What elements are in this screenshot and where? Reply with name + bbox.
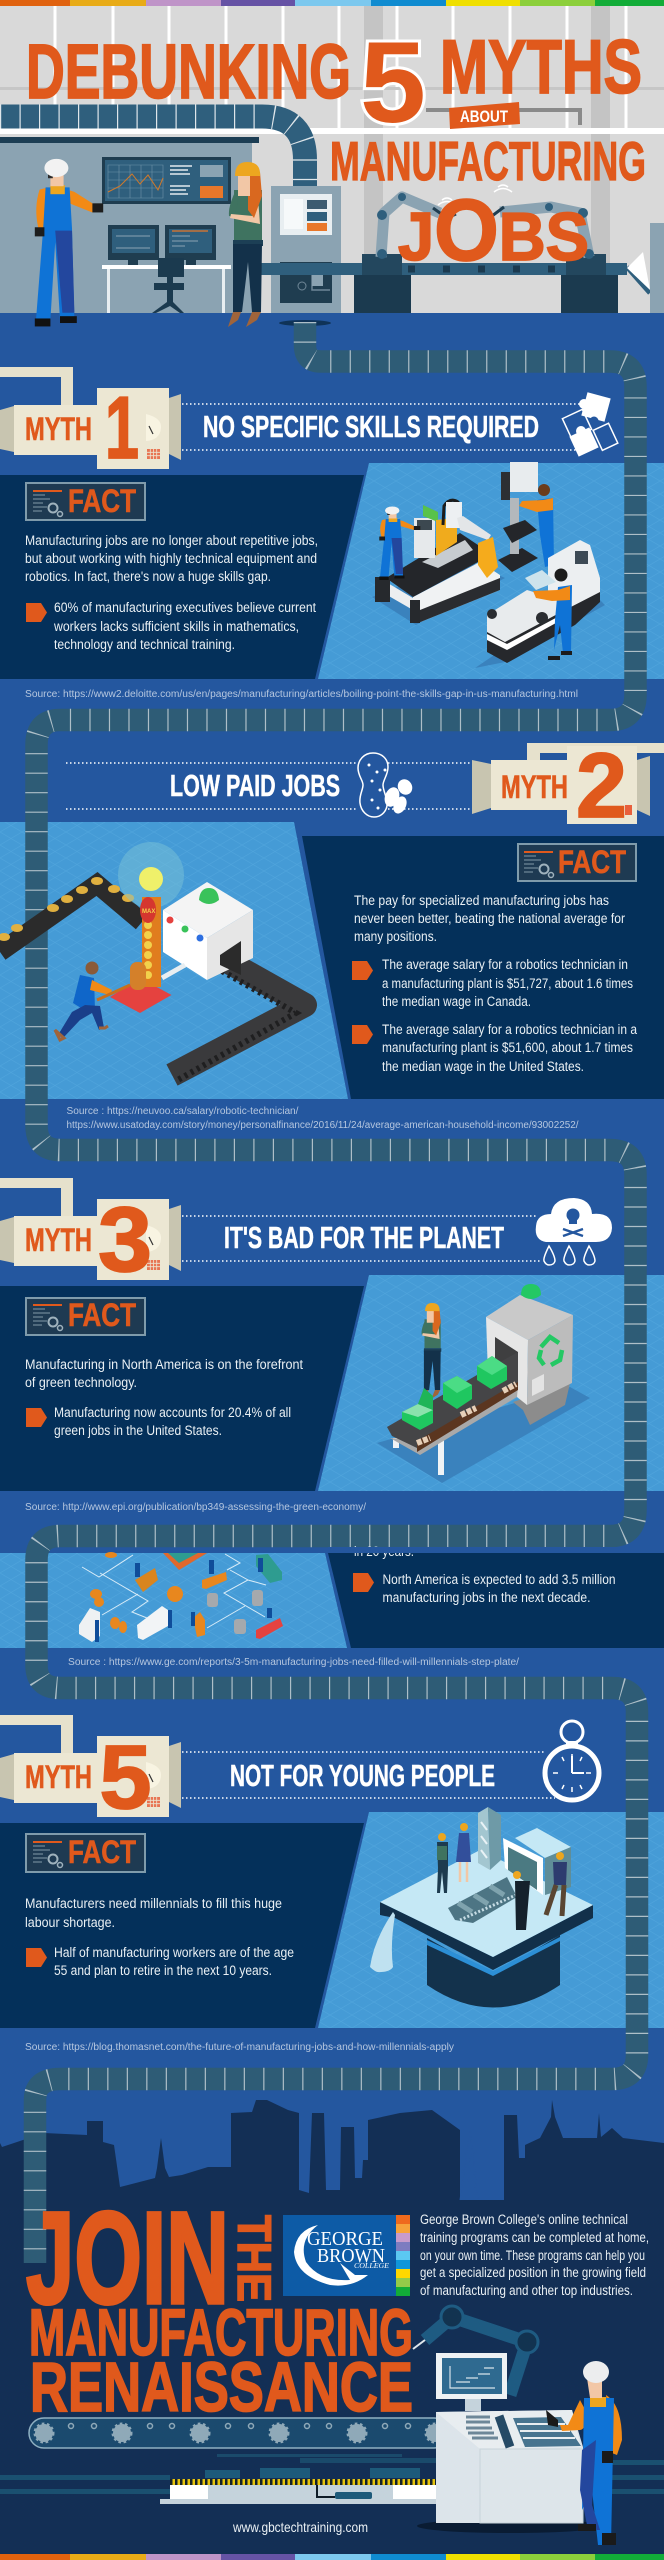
- myth 2 bullet: United States: the median wage in the United States.: [382, 1059, 584, 1074]
- fact badge: FACT: [68, 483, 136, 519]
- myth 2 badge: [472, 735, 664, 837]
- output belt: [172, 960, 305, 1081]
- George Brown College logo: GEORGE: [307, 2228, 383, 2250]
- hero title: DEBUNKING: [26, 29, 351, 115]
- myth 2 heading: LOW PAID JOBS: [170, 768, 340, 803]
- cutting bed machine: [375, 500, 500, 623]
- myth 2 fact text: [354, 893, 625, 944]
- myth 2 bullet: Canada: the median wage in Canada.: [382, 994, 531, 1009]
- college description: [420, 2212, 649, 2298]
- RENAISSANCE headline: RENAISSANCE: [30, 2348, 413, 2426]
- myth 3 source: Source: http://www.epi.org/publication/bp349-assessing-the-green-economy/: [25, 1502, 366, 1513]
- myth 5 fact text: Manufacturers need millennials to fill this huge: [25, 1896, 282, 1911]
- myth 2 fact text: The pay for specialized manufacturing jobs has: [354, 893, 609, 908]
- closing section: [0, 2184, 664, 2545]
- top colour bar: [0, 0, 664, 6]
- myth 5 heading: NOT FOR YOUNG PEOPLE: [230, 1758, 495, 1793]
- floor hatch: [279, 320, 331, 326]
- college description: George Brown College's online technical: [420, 2212, 628, 2227]
- MYTH 4 remnant section: [68, 1544, 664, 1668]
- myth 1 badge: MYTH: [25, 411, 92, 447]
- dotted rules: [182, 404, 580, 450]
- myth 2 bullet: United States: manufacturing plant is $51,600, about 1.7 times: [382, 1040, 633, 1055]
- fact badge: [26, 483, 145, 520]
- operator at lathe: [533, 568, 572, 660]
- MYTH 2 section: [0, 735, 664, 1131]
- MYTH 5 section: [0, 1715, 599, 2053]
- hero illustration: factory: [0, 6, 664, 313]
- panel backgrounds: myth 2: [0, 822, 664, 1099]
- myth 2 fact text: never been better, beating the national average for: [354, 911, 625, 926]
- worker at console: [546, 2361, 622, 2545]
- George Brown College logo: BROWN: [317, 2245, 385, 2267]
- fact badge: [26, 1297, 145, 1335]
- graduation machines: [448, 1807, 571, 1923]
- fact badge: FACT: [68, 1834, 136, 1870]
- high striker tower: MAX: [142, 909, 155, 915]
- college description: of manufacturing and other top industries.: [420, 2283, 633, 2298]
- operator with white helmet: [379, 506, 420, 580]
- myth 1 badge: 1: [105, 378, 139, 477]
- myth 5 source: Source: https://blog.thomasnet.com/the-future-of-manufacturing-jobs-and-how-millennials-apply: [25, 2042, 454, 2053]
- illustration: graduation cap factory: [370, 1807, 593, 2008]
- illustration: workers at CNC machines: [372, 462, 605, 668]
- myth 3 badge: MYTH: [25, 1222, 92, 1258]
- control console: [417, 2353, 603, 2533]
- icon: stopwatch: [545, 1721, 599, 1800]
- myth 2 fact text: many positions.: [354, 929, 437, 944]
- lathe machine: [487, 540, 600, 663]
- myth 1 bullet: technology and technical training.: [54, 637, 235, 652]
- machines: [163, 1553, 207, 1570]
- control cabinet: [271, 186, 341, 313]
- myth 5 fact text: [25, 1896, 282, 1930]
- fact badge: [518, 844, 636, 881]
- about tag: [449, 102, 520, 129]
- myth 4 bullet: North America is expected to add 3.5 million: [382, 1572, 616, 1587]
- George Brown College logo: COLLEGE: [354, 2262, 390, 2270]
- myth 3 bullet: green jobs in the United States.: [54, 1423, 222, 1438]
- myth 1 source: Source: https://www2.deloitte.com/us/en/pages/manufacturing/articles/boiling-point-the-skills-gap-in-us-manufacturing.html: [25, 689, 578, 700]
- myth 1 badge: [0, 367, 181, 477]
- myth 2 source: [66, 1106, 579, 1131]
- green boxes: [402, 1356, 507, 1430]
- myth 4 bullet: manufacturing jobs in the next decade.: [382, 1590, 590, 1605]
- machine: [486, 1284, 573, 1425]
- JOIN headline: JOIN: [26, 2184, 229, 2331]
- myth 3 bullet: [26, 1405, 291, 1438]
- closing section background: skyline: [0, 2100, 664, 2560]
- myth 4 bullet: [353, 1572, 616, 1605]
- floor: [0, 313, 664, 343]
- myth 3 fact text: Manufacturing in North America is on the forefront: [25, 1357, 303, 1372]
- myth 4 source: Source : https://www.ge.com/reports/3-5m-manufacturing-jobs-need-filled-will-millennials-step-plate/: [68, 1657, 519, 1668]
- website URL: www.gbctechtraining.com: [232, 2519, 368, 2535]
- myth 1 bullet: 60% of manufacturing executives believe current: [54, 600, 316, 615]
- about tag: ABOUT: [460, 107, 508, 126]
- myth 3 badge: 3: [98, 1189, 152, 1291]
- myth 5 bullet: [26, 1945, 294, 1978]
- icon: toxic cloud: [536, 1198, 612, 1265]
- hero title: JOBS: [398, 182, 589, 279]
- drill press: [498, 462, 538, 572]
- icon: peanut: [358, 753, 415, 817]
- conveyor belt connecting the sections: [35, 322, 637, 2263]
- myth 2 bullet: Canada: The average salary for a robotics technician in: [382, 957, 628, 972]
- myth 3 fact text: of green technology.: [25, 1375, 137, 1390]
- myth 1 bullet: [26, 600, 316, 652]
- myth 5 bullet: Half of manufacturing workers are of the age: [54, 1945, 294, 1960]
- large wall monitor: [102, 157, 231, 204]
- conveyor: [387, 1352, 518, 1455]
- operator at drill: [519, 484, 554, 567]
- myth 2 bullet: Canada: [352, 957, 633, 1009]
- dotted rules: [66, 763, 472, 809]
- clipped text: in 20 years.: [354, 1544, 414, 1559]
- fact badge: [26, 1834, 145, 1872]
- panel backgrounds: myth 5: [0, 1812, 664, 2028]
- myth 5 badge: MYTH: [25, 1759, 92, 1795]
- robot arm: [413, 2306, 538, 2395]
- MANUFACTURING headline: MANUFACTURING: [29, 2295, 413, 2369]
- illustration: recycling machine and green boxes: [377, 1284, 590, 1483]
- small workers: [95, 1558, 272, 1642]
- panel backgrounds: myth 1: [0, 463, 664, 679]
- myth 2 badge: 2: [576, 735, 627, 837]
- coin conveyor: [0, 877, 142, 952]
- fact badge: FACT: [558, 844, 626, 880]
- myth 5 fact text: labour shortage.: [25, 1915, 115, 1930]
- illustration: high striker machine and coin conveyor: [0, 842, 305, 1081]
- office chair: [152, 258, 184, 313]
- white machine cube: [162, 882, 253, 980]
- myth 5 badge: 5: [100, 1728, 152, 1828]
- bottom colour bar: [0, 2554, 664, 2560]
- man with hammer: [55, 962, 130, 1040]
- myth 1 fact text: [25, 533, 318, 584]
- cover over clipped text: [328, 1547, 664, 1553]
- myth 1 fact text: robotics. In fact, there's now a huge skills gap.: [25, 569, 271, 584]
- myth 2 badge: MYTH: [501, 769, 568, 805]
- MYTH 1 section: [0, 367, 618, 700]
- myth 1 fact text: but about working with highly technical equipment and: [25, 551, 317, 566]
- assembly platform: [0, 2454, 664, 2504]
- panel backgrounds: myth 4: [0, 1553, 664, 1648]
- myth 3 bullet: Manufacturing now accounts for 20.4% of all: [54, 1405, 291, 1420]
- fact badge: FACT: [68, 1297, 136, 1333]
- engineer woman: [228, 162, 263, 327]
- factory conveyor and robot arms: [260, 185, 664, 313]
- icon: puzzle: [562, 392, 618, 457]
- desktop monitors and desk: [102, 225, 231, 313]
- myth 2 bullet: United States: The average salary for a robotics technician in a: [382, 1022, 637, 1037]
- four small workers: [437, 1823, 567, 1930]
- myth 3 heading: IT'S BAD FOR THE PLANET: [224, 1220, 504, 1255]
- illustration: factory floor plan: [79, 1552, 283, 1642]
- myth 5 bullet: 55 and plan to retire in the next 10 years.: [54, 1963, 272, 1978]
- THE vertical word: THE: [228, 2215, 281, 2302]
- myth 1 fact text: Manufacturing jobs are no longer about repetitive jobs,: [25, 533, 318, 548]
- myth 2 bullet: United States: [352, 1022, 637, 1074]
- dotted rules: [182, 1216, 542, 1261]
- dotted rules: [182, 1752, 555, 1798]
- myth 3 badge: [0, 1178, 181, 1291]
- gear conveyor: [29, 2418, 449, 2448]
- engineer man: [35, 159, 103, 326]
- orange cylinders and parts: [90, 1552, 183, 1633]
- myth 5 badge: [0, 1715, 181, 1828]
- hero title: [26, 19, 646, 279]
- grey cylinders: [207, 1590, 263, 1634]
- myth 2 source: https://www.usatoday.com/story/money/personalfinance/2016/11/24/average-american-household-income/93002252/: [66, 1120, 579, 1131]
- woman worker: [421, 1303, 441, 1399]
- myth 1 bullet: workers lacks sufficient skills in mathematics,: [53, 619, 299, 634]
- MYTH 3 section: [0, 1178, 612, 1513]
- hero title: 5: [360, 19, 426, 147]
- myth 3 fact text: [25, 1357, 303, 1390]
- panel backgrounds: myth 3: [0, 1275, 664, 1491]
- myth 2 source: Source : https://neuvoo.ca/salary/robotic-technician/: [66, 1106, 299, 1117]
- high striker tower: [110, 842, 184, 1013]
- George Brown College logo: [283, 2215, 410, 2296]
